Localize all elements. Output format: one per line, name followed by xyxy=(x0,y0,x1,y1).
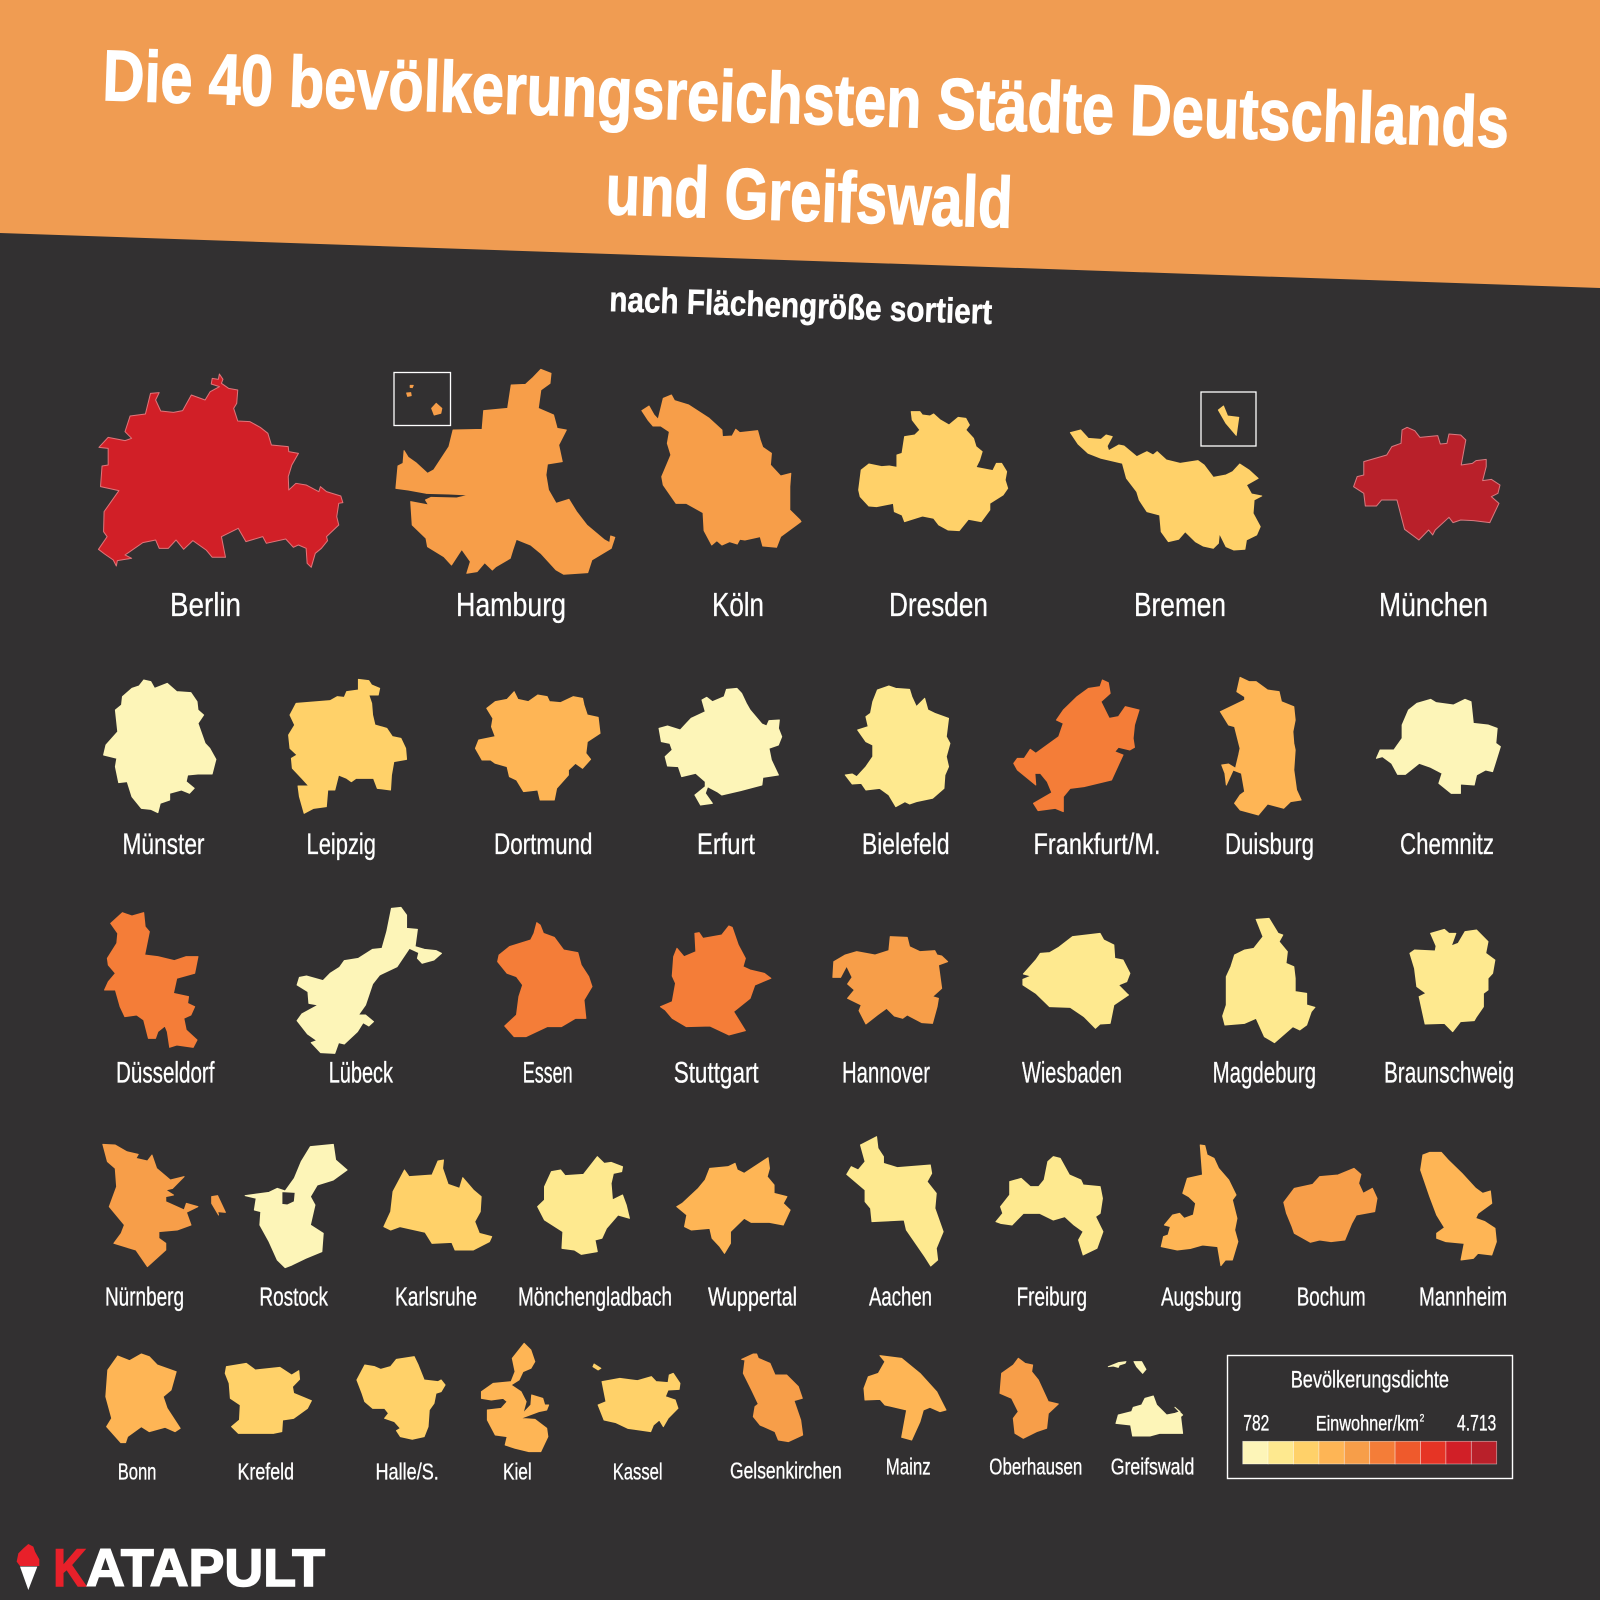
legend unit: Einwohner/km xyxy=(1316,1413,1419,1436)
header banner xyxy=(0,0,1600,288)
city: Bonn xyxy=(106,1354,180,1484)
city: Hannover xyxy=(833,937,948,1090)
city: Frankfurt/M. xyxy=(1014,680,1160,861)
city: Dresden xyxy=(859,412,1008,623)
city: Rostock xyxy=(245,1144,347,1311)
city: Magdeburg: Magdeburg xyxy=(1213,1057,1316,1090)
city: Chemnitz xyxy=(1376,699,1500,861)
city: Kiel xyxy=(481,1343,549,1484)
city: Hamburg: Hamburg xyxy=(456,586,566,623)
legend unit: 2 xyxy=(1420,1413,1424,1425)
city: Mannheim: Mannheim xyxy=(1419,1283,1507,1311)
legend title: Bevölkerungsdichte xyxy=(1291,1366,1449,1393)
city: Halle/S. xyxy=(357,1357,445,1484)
city: Bochum: Bochum xyxy=(1297,1283,1366,1311)
city: Greifswald: Greifswald xyxy=(1111,1453,1194,1479)
city: Hamburg xyxy=(396,369,615,623)
city: Lübeck: Lübeck xyxy=(329,1057,394,1090)
subtitle: nach Flächengröße sortiert xyxy=(609,280,993,332)
city: Augsburg: Augsburg xyxy=(1161,1283,1242,1311)
title xyxy=(101,36,1510,244)
city: Duisburg: Duisburg xyxy=(1225,828,1314,861)
city: Freiburg xyxy=(996,1157,1103,1311)
city: Wiesbaden: Wiesbaden xyxy=(1022,1057,1122,1090)
city: Aachen: Aachen xyxy=(869,1283,932,1311)
city: Kassel xyxy=(593,1364,680,1484)
city: Bremen: Bremen xyxy=(1134,586,1226,623)
city: Düsseldorf: Düsseldorf xyxy=(116,1057,215,1090)
city: Augsburg xyxy=(1161,1145,1242,1311)
city: Kassel: Kassel xyxy=(613,1458,663,1484)
city: Bielefeld: Bielefeld xyxy=(862,828,950,861)
city: Braunschweig: Braunschweig xyxy=(1384,1057,1514,1090)
city: Bonn: Bonn xyxy=(118,1458,156,1484)
city: Dresden: Dresden xyxy=(889,586,988,623)
city: Leipzig: Leipzig xyxy=(306,828,376,861)
city: Bremen xyxy=(1070,430,1262,623)
city: Mönchengladbach: Mönchengladbach xyxy=(518,1283,672,1311)
city: Oberhausen xyxy=(989,1358,1082,1479)
city: Wiesbaden xyxy=(1022,933,1130,1090)
legend maximum: 4.713 xyxy=(1457,1411,1496,1436)
city: Frankfurt/M.: Frankfurt/M. xyxy=(1034,828,1160,861)
city: Mainz xyxy=(864,1356,946,1479)
city: Essen: Essen xyxy=(523,1057,573,1090)
city: Rostock: Rostock xyxy=(259,1283,328,1311)
city: München: München xyxy=(1379,586,1488,623)
city: Dortmund: Dortmund xyxy=(494,828,592,861)
city: Aachen xyxy=(847,1137,943,1311)
city: Kiel: Kiel xyxy=(503,1458,532,1484)
city: Freiburg: Freiburg xyxy=(1017,1283,1087,1311)
wordmark: K xyxy=(53,1539,86,1598)
city: München xyxy=(1354,427,1500,623)
city: Stuttgart: Stuttgart xyxy=(674,1057,759,1090)
city: Erfurt: Erfurt xyxy=(697,828,756,861)
city: Münster xyxy=(104,680,216,861)
city: Münster: Münster xyxy=(122,828,205,861)
city: Wuppertal xyxy=(677,1158,797,1311)
city: Greifswald xyxy=(1108,1362,1194,1479)
city: Köln xyxy=(642,395,801,623)
city: Bochum xyxy=(1284,1168,1377,1311)
city: Dortmund xyxy=(475,692,600,861)
city: Düsseldorf xyxy=(105,913,215,1090)
legend colour scale xyxy=(1243,1441,1497,1464)
city: Duisburg xyxy=(1220,677,1314,861)
city: Köln: Köln xyxy=(712,586,764,623)
title: und Greifswald xyxy=(604,150,1014,244)
city: Berlin: Berlin xyxy=(170,586,241,623)
legend: Bevölkerungsdichte xyxy=(1228,1356,1512,1478)
city: Essen xyxy=(498,923,592,1090)
city: Erfurt xyxy=(659,688,782,861)
city: Krefeld xyxy=(225,1363,311,1484)
city: Bielefeld xyxy=(845,686,950,861)
city: Stuttgart xyxy=(660,926,771,1090)
inset: Bremerhaven xyxy=(1201,392,1256,446)
city: Leipzig xyxy=(289,679,407,861)
icon: ice cream cone xyxy=(17,1544,39,1590)
city: Nürnberg: Nürnberg xyxy=(105,1283,184,1311)
city: Nürnberg xyxy=(103,1144,225,1311)
city: Chemnitz: Chemnitz xyxy=(1400,828,1494,861)
city: Mannheim xyxy=(1419,1152,1507,1311)
city: Berlin xyxy=(98,374,343,623)
city: Wuppertal: Wuppertal xyxy=(708,1283,797,1311)
city: Halle/S.: Halle/S. xyxy=(376,1458,439,1484)
city: Gelsenkirchen xyxy=(730,1354,842,1484)
legend minimum: 782 xyxy=(1243,1411,1269,1436)
city: Braunschweig xyxy=(1384,929,1514,1090)
city: Mönchengladbach xyxy=(518,1157,672,1311)
city: Mainz: Mainz xyxy=(886,1453,931,1479)
city: Magdeburg xyxy=(1213,918,1316,1090)
city: Karlsruhe xyxy=(384,1160,492,1311)
city: Hannover: Hannover xyxy=(842,1057,930,1090)
wordmark: ATAPULT xyxy=(86,1539,325,1598)
city: Karlsruhe: Karlsruhe xyxy=(395,1283,477,1311)
inset: Hamburg exclaves xyxy=(394,372,450,426)
city: Gelsenkirchen: Gelsenkirchen xyxy=(730,1458,842,1484)
logo: KATAPULT xyxy=(17,1539,325,1598)
city: Oberhausen: Oberhausen xyxy=(989,1453,1082,1479)
city: Lübeck xyxy=(297,907,441,1090)
city: Krefeld: Krefeld xyxy=(238,1458,294,1484)
